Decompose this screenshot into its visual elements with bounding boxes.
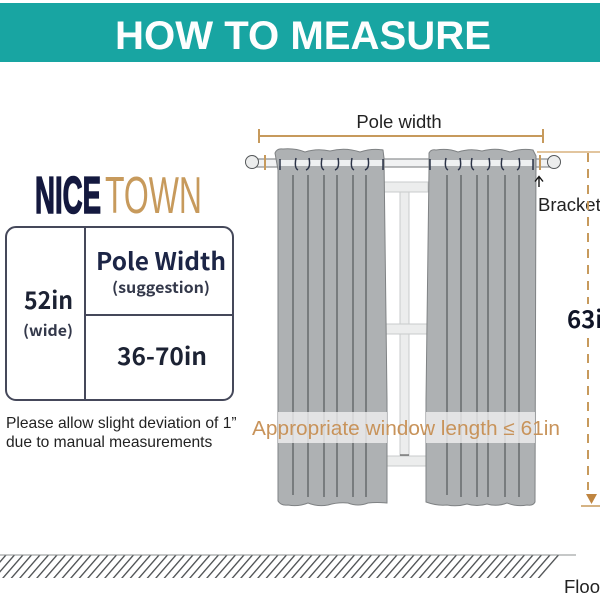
pole width value: 36-70in [117,337,207,372]
floor [0,555,576,578]
right curtain [426,149,536,506]
deviation note: Please allow slight deviation of 1” [6,415,237,432]
curtain pole [246,156,560,168]
pole width dimension line [259,129,543,170]
window length callout: Appropriate window length ≤ 61in [252,418,560,440]
height dimension [537,152,600,506]
left curtain [275,149,387,506]
header band [0,3,600,62]
width note: (wide) [23,320,73,341]
deviation note: due to manual measurements [6,434,213,451]
title: HOW TO MEASURE [115,14,491,58]
logo: NICE [35,167,101,225]
pole width heading: Pole Width [96,242,226,277]
window length callout [252,412,560,443]
right curtain grommets [430,158,533,170]
left curtain grommets [280,158,383,170]
width value: 52in [24,281,73,316]
pole width label: Pole width [356,111,442,132]
left finial [246,156,258,168]
suggestion note: (suggestion) [112,277,210,298]
window frame [384,182,428,466]
size table [6,227,233,400]
right finial [548,156,560,168]
bracket label: Bracket [538,194,600,215]
bracket arrow [535,176,543,187]
logo: TOWN [105,167,202,225]
